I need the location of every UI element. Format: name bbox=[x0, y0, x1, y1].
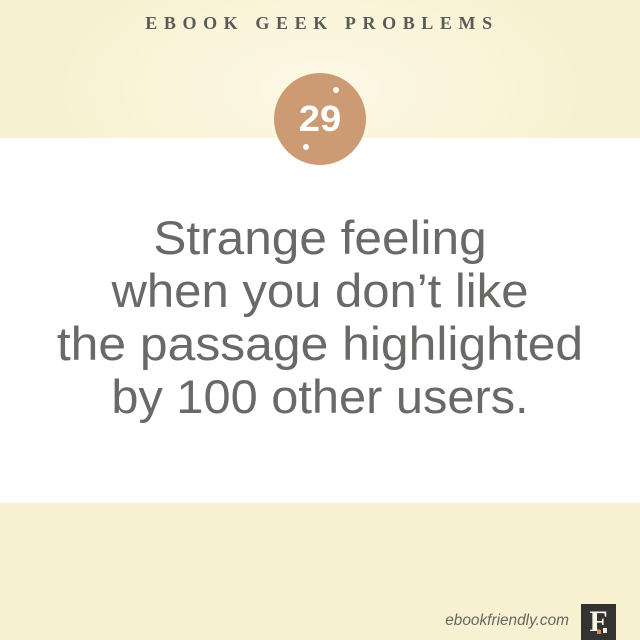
badge dot top bbox=[333, 87, 339, 93]
badge number: 29 bbox=[299, 98, 341, 139]
logo: ebook friendly bbox=[581, 604, 616, 640]
bottom footer band bbox=[0, 503, 640, 640]
number badge bbox=[274, 73, 366, 165]
logo letter: F bbox=[589, 605, 608, 638]
heading: ebook geek problems: EBOOK GEEK PROBLEMS bbox=[145, 13, 499, 33]
main quote text bbox=[57, 211, 583, 423]
quote line 3: the passage highlighted bbox=[57, 317, 583, 370]
quote line 2: when you don’t like bbox=[112, 264, 528, 317]
top header band bbox=[0, 0, 640, 138]
logo accent square bbox=[597, 630, 601, 634]
logo dot bbox=[603, 628, 607, 633]
quote line 1: Strange feeling bbox=[153, 211, 487, 264]
white main panel bbox=[0, 138, 640, 503]
quote line 4: by 100 other users. bbox=[111, 370, 529, 423]
website url: ebookfriendly.com bbox=[445, 612, 569, 629]
badge dot bottom bbox=[303, 144, 309, 150]
